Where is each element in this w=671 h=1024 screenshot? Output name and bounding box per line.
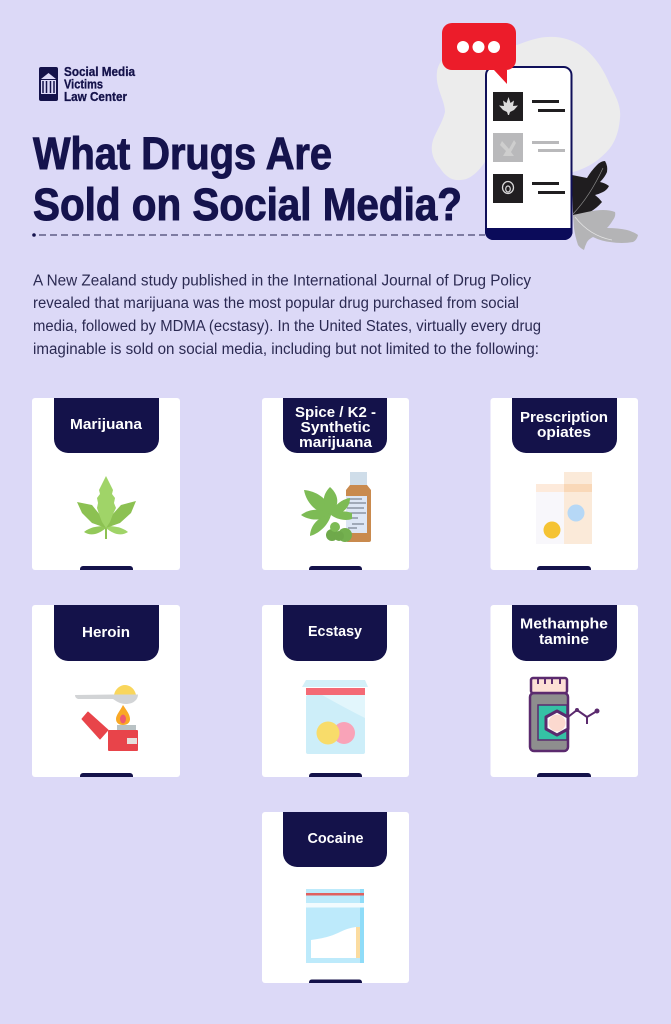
bottom tab	[80, 773, 133, 777]
intro paragraph: media, followed by MDMA (ecstasy). In the United States, virtually every drug	[33, 318, 541, 335]
title	[33, 128, 462, 230]
card: Prescription opiates	[490, 398, 638, 570]
card: Ecstasy: Ecstasy	[308, 624, 362, 640]
title: What Drugs Are	[33, 128, 332, 179]
icon: bottle and molecule	[530, 678, 600, 751]
card: Methamphetamine: tamine	[539, 632, 589, 648]
chat bubble	[442, 23, 516, 84]
illustration: phone with chat bubble and leaves	[432, 23, 638, 250]
card: Spice / K2: marijuana	[299, 435, 373, 451]
title: Sold on Social Media?	[33, 179, 462, 230]
card: Spice / K2: Synthetic	[300, 420, 370, 436]
card: Marijuana	[32, 398, 180, 570]
bottom tab	[80, 566, 133, 570]
card: Prescription opiates: opiates	[537, 425, 591, 441]
icon: spoon and lighter	[75, 685, 138, 751]
bottom tab	[309, 979, 362, 983]
card: Heroin: Heroin	[82, 625, 130, 641]
background blob	[432, 37, 620, 180]
phone row: faded	[493, 133, 565, 162]
intro paragraph	[33, 272, 541, 358]
icon: bag of powder	[306, 889, 364, 963]
card: Ecstasy	[262, 605, 409, 777]
card: Prescription opiates: Prescription	[520, 410, 608, 426]
icon: cannabis leaf	[77, 476, 136, 539]
card: Cocaine	[262, 812, 409, 983]
logo: Social Media	[64, 65, 136, 79]
phone row: mouth	[493, 174, 565, 203]
card: Spice / K2	[262, 398, 409, 570]
dark leaf	[572, 161, 609, 215]
bottom tab	[537, 773, 591, 777]
phone row: cannabis	[493, 92, 565, 121]
logo	[39, 65, 136, 104]
card: Methamphetamine: Methamphe	[520, 616, 608, 632]
card: Heroin	[32, 605, 180, 777]
intro paragraph: revealed that marijuana was the most popular drug purchased from social	[33, 295, 519, 312]
card: Marijuana: Marijuana	[70, 417, 143, 433]
grey leaf	[573, 210, 638, 250]
bottom tab	[537, 566, 591, 570]
logo: Victims	[64, 78, 103, 92]
bottom tab	[309, 773, 362, 777]
card: Cocaine: Cocaine	[308, 831, 364, 847]
logo: Law Center	[64, 90, 127, 104]
intro paragraph: imaginable is sold on social media, including but not limited to the following:	[33, 341, 539, 358]
card: Spice / K2: Spice / K2 -	[295, 405, 376, 421]
bottom tab	[309, 566, 362, 570]
dashed divider line	[32, 233, 485, 237]
card: Methamphetamine	[490, 605, 638, 777]
icon: pills in packets	[536, 472, 592, 544]
icon: bag of pills	[302, 680, 368, 754]
intro paragraph: A New Zealand study published in the International Journal of Drug Policy	[33, 272, 531, 290]
icon: bottle and leaf	[301, 472, 371, 542]
phone	[485, 67, 572, 240]
